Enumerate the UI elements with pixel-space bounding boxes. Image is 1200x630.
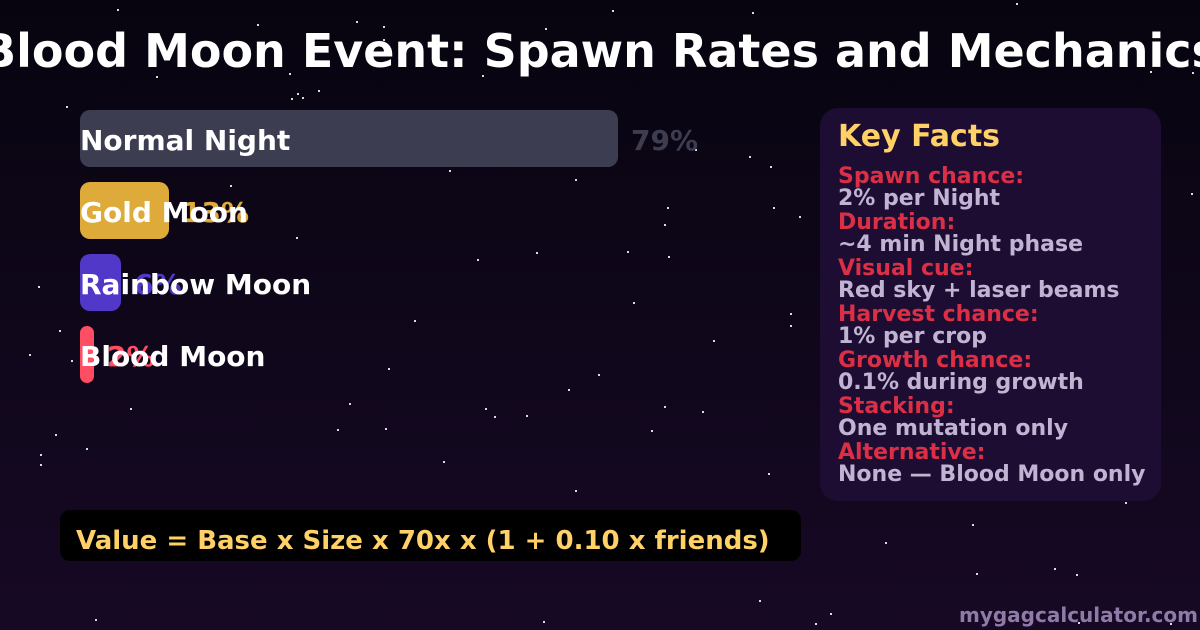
bar: Rainbow Moon: Rainbow Moon [80, 268, 311, 301]
fact list: One mutation only [838, 416, 1068, 441]
bar: Normal Night: Normal Night [80, 124, 290, 157]
panel: key facts [820, 108, 1161, 501]
bar: Gold Moon: Gold Moon [80, 196, 248, 229]
fact list [838, 164, 1145, 487]
fact list: Growth chance: [838, 348, 1032, 373]
bar: Blood Moon: Blood Moon [80, 340, 265, 373]
heading: key facts: Key Facts [838, 119, 1000, 154]
fact list: Spawn chance: [838, 164, 1024, 189]
bar: Rainbow Moon [80, 254, 311, 311]
fact list: Duration: [838, 210, 955, 235]
fact list: Red sky + laser beams [838, 278, 1120, 303]
fact list: ~4 min Night phase [838, 232, 1083, 257]
bar: Gold Moon [80, 182, 249, 239]
fact list: None — Blood Moon only [838, 462, 1145, 487]
fact list: Visual cue: [838, 256, 973, 281]
fact list: Harvest chance: [838, 302, 1039, 327]
formula callout: Value = Base x Size x 70x x (1 + 0.10 x friends) [76, 526, 770, 556]
formula callout [60, 510, 801, 561]
bar: Blood Moon: 2% [107, 340, 155, 373]
bar: Blood Moon [80, 326, 265, 383]
watermark: mygagcalculator.com [959, 603, 1198, 627]
fact list: Stacking: [838, 394, 955, 419]
bar: Normal Night [80, 110, 698, 167]
fact list: 1% per crop [838, 324, 987, 349]
bar chart: spawn rates [80, 110, 698, 383]
fact list: 0.1% during growth [838, 370, 1084, 395]
fact list: Alternative: [838, 440, 985, 465]
bar: Rainbow Moon: 6% [134, 268, 182, 301]
bar: Gold Moon: 13% [182, 196, 249, 229]
fact list: 2% per Night [838, 186, 1001, 211]
bar: Normal Night: 79% [631, 124, 698, 157]
